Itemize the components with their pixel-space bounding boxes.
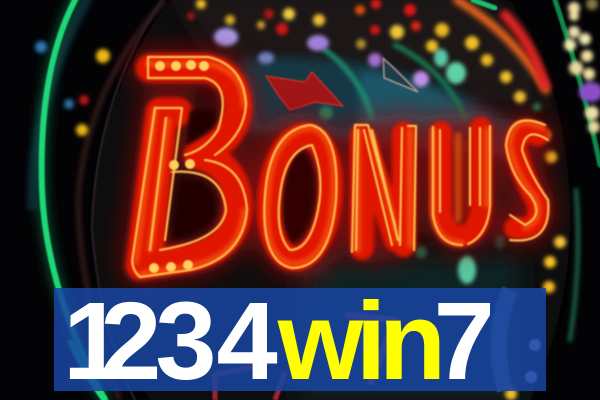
neon word BONUS	[132, 57, 548, 277]
title banner	[54, 288, 546, 391]
white and purple lights at right edge	[564, 0, 600, 133]
red letter bodies	[140, 68, 539, 266]
pale neon inner tubes	[132, 57, 548, 277]
lower reel details behind banner	[70, 290, 541, 400]
wide dark red halo	[140, 68, 536, 266]
red arrow emblem	[266, 58, 418, 110]
title text: 1234win7	[63, 280, 495, 400]
letter bulb dots	[149, 60, 209, 273]
dark letter counters	[172, 110, 470, 243]
hot orange core of tubes	[136, 64, 543, 274]
